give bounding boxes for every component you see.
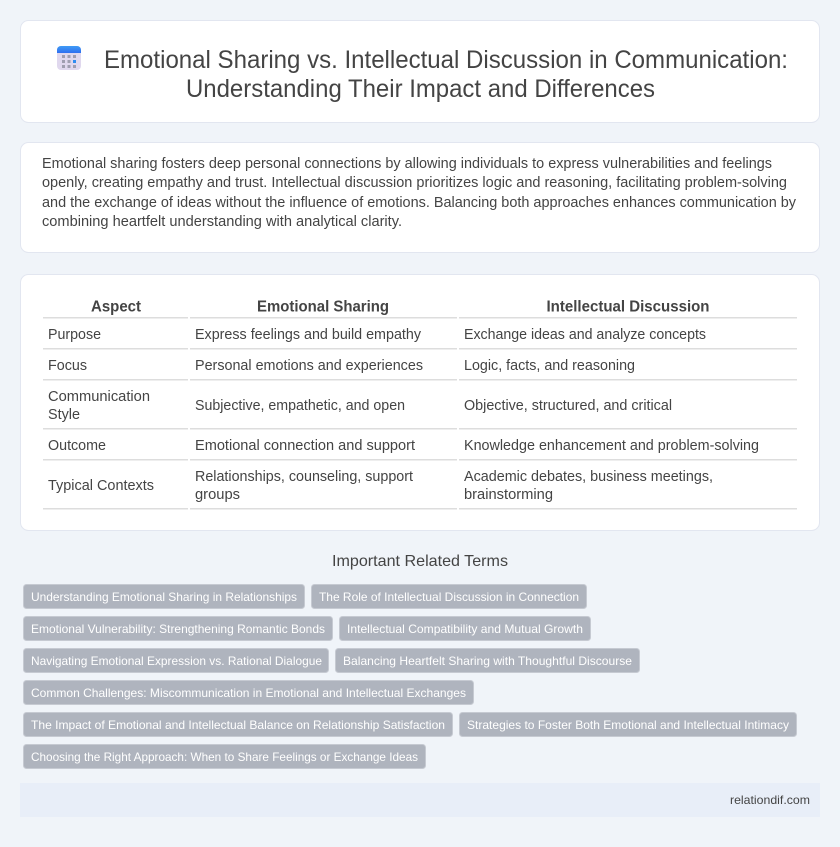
tag	[340, 616, 590, 640]
text block: introduction paragraph	[42, 156, 797, 230]
tag: Emotional Vulnerability: Strengthening Romantic Bonds	[31, 622, 325, 636]
table header: Emotional Sharing	[257, 298, 389, 316]
table row: communication style: Style	[48, 407, 80, 423]
table row: purpose: Purpose	[48, 327, 101, 343]
text block: introduction paragraph: openly, creating empathy and trust. Intellectual discussion prioritizes logic and reasoning, facilitating problem-solving	[42, 175, 787, 191]
tag: The Role of Intellectual Discussion in Connection	[319, 590, 579, 604]
table row: purpose	[43, 327, 797, 350]
tag: Choosing the Right Approach: When to Share Feelings or Exchange Ideas	[31, 750, 418, 764]
table row: outcome: Emotional connection and support	[195, 438, 415, 454]
table row: communication style: Communication	[48, 389, 150, 405]
tag list: related terms	[24, 584, 796, 768]
table row: typical contexts	[43, 469, 797, 510]
tag	[24, 680, 474, 704]
table row: outcome: Knowledge enhancement and problem-solving	[464, 438, 759, 454]
table row: typical contexts: groups	[195, 487, 240, 503]
tag	[24, 616, 332, 640]
table row: purpose: Express feelings and build empathy	[195, 327, 422, 343]
panel: comparison table	[20, 274, 820, 530]
tag	[24, 744, 426, 768]
table row: communication style: Objective, structured, and critical	[464, 398, 672, 414]
tag: Common Challenges: Miscommunication in Emotional and Intellectual Exchanges	[31, 686, 466, 700]
icon: calendar	[57, 46, 81, 70]
table row: focus: Personal emotions and experiences	[195, 358, 423, 374]
table row: communication style: Subjective, empathetic, and open	[195, 398, 405, 414]
panel: introduction	[20, 142, 820, 252]
heading: title: Understanding Their Impact and Differences	[186, 75, 655, 103]
tag	[24, 712, 452, 736]
tag	[312, 584, 586, 608]
tag: Balancing Heartfelt Sharing with Thoughtful Discourse	[343, 654, 632, 668]
table row: typical contexts: Academic debates, business meetings,	[464, 469, 713, 485]
table row: purpose: Exchange ideas and analyze concepts	[464, 327, 706, 343]
footer: relationdif.com	[730, 793, 810, 807]
heading: title: Emotional Sharing vs. Intellectual Discussion in Communication:	[104, 46, 788, 74]
tag: Understanding Emotional Sharing in Relationships	[31, 590, 297, 604]
table row: typical contexts: Relationships, counseling, support	[195, 469, 413, 485]
tag	[336, 648, 640, 672]
table header: Aspect	[91, 298, 142, 316]
tag: Navigating Emotional Expression vs. Rational Dialogue	[31, 654, 322, 668]
text block: introduction paragraph: and the exchange of ideas without the influence of emotions. Balancing both approaches enhances communication by	[42, 195, 797, 211]
table header	[43, 298, 797, 318]
text block: introduction paragraph: Emotional sharing fosters deep personal connections by allowing individuals to express vulnerabilities and feelings	[42, 156, 772, 172]
panel: title header	[20, 20, 820, 122]
heading: title	[104, 46, 788, 103]
footer	[20, 783, 820, 817]
table row: focus: Logic, facts, and reasoning	[464, 358, 635, 374]
heading: important related terms: Important Related Terms	[332, 553, 508, 570]
table row: focus	[43, 358, 797, 380]
tag: Intellectual Compatibility and Mutual Growth	[347, 622, 583, 636]
table row: typical contexts: Typical Contexts	[48, 478, 154, 494]
table row: outcome	[43, 438, 797, 460]
tag	[460, 712, 796, 736]
tag: The Impact of Emotional and Intellectual Balance on Relationship Satisfaction	[31, 718, 445, 732]
table row: focus: Focus	[48, 358, 87, 374]
tag	[24, 584, 304, 608]
table row: typical contexts: brainstorming	[464, 487, 553, 503]
tag	[24, 648, 328, 672]
tag: Strategies to Foster Both Emotional and Intellectual Intimacy	[467, 718, 789, 732]
table header: Intellectual Discussion	[546, 298, 710, 316]
text block: introduction paragraph: combining heartfelt understanding with analytical clarity.	[42, 214, 402, 230]
table row: communication style	[43, 389, 797, 430]
table row: outcome: Outcome	[48, 438, 106, 454]
